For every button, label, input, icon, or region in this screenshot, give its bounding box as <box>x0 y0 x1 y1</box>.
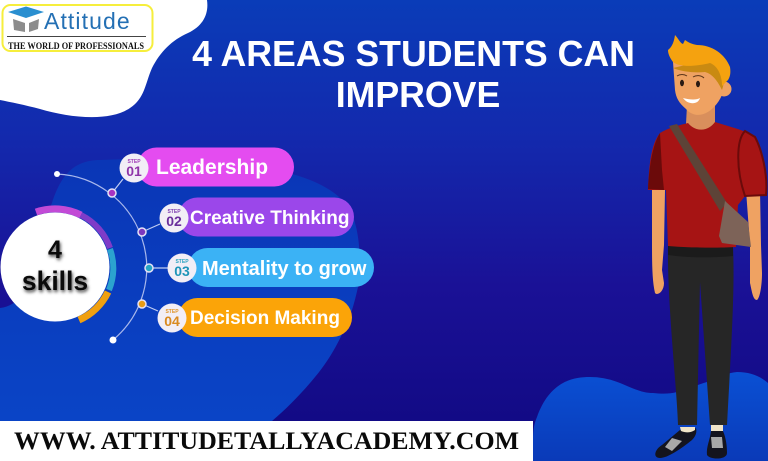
white top-left shape with logo <box>0 0 207 117</box>
label: skills <box>22 266 88 296</box>
end dots <box>54 171 60 177</box>
website bar: WWW. ATTITUDETALLYACADEMY.COM <box>14 428 519 455</box>
waistband <box>668 246 733 257</box>
label: 4 <box>48 236 62 264</box>
neck <box>686 105 715 132</box>
step badge 02 <box>160 204 188 232</box>
node 4 <box>138 300 146 308</box>
shirt <box>648 122 766 248</box>
logo icon: graduation cap <box>8 6 44 32</box>
title <box>192 34 635 115</box>
step badge 03: 03 <box>174 263 190 279</box>
step badge 03 <box>168 254 196 282</box>
progress ring <box>36 209 113 320</box>
step badge 03: STEP <box>175 259 189 265</box>
shirt left sleeve shade <box>648 133 664 190</box>
step badge 04: 04 <box>164 313 180 329</box>
title: IMPROVE <box>336 75 500 115</box>
messenger bag <box>719 201 751 247</box>
step badge 01 <box>120 154 148 182</box>
step badge 01: 01 <box>126 163 142 179</box>
label shadow <box>23 238 89 298</box>
connector arcs and nodes <box>54 171 169 344</box>
ear <box>716 82 732 96</box>
node 1 <box>108 189 116 197</box>
step badge 01: STEP <box>127 159 141 165</box>
step badge 04 <box>158 304 186 332</box>
step 4: Decision Making <box>158 298 352 337</box>
website bar <box>0 421 533 461</box>
shirt right sleeve <box>738 131 766 196</box>
step 2: Creative Thinking: Creative Thinking <box>190 208 349 229</box>
arms <box>652 190 665 294</box>
step 1: Leadership: Leadership <box>156 156 268 179</box>
bag strap <box>669 124 727 211</box>
step badge 04: STEP <box>165 309 179 315</box>
logo box <box>2 5 152 51</box>
face details <box>680 80 684 86</box>
label shadow: 4 <box>49 238 63 266</box>
node 3 <box>145 264 153 272</box>
step badge 02: 02 <box>166 213 182 229</box>
step 4: Decision Making: Decision Making <box>190 308 340 329</box>
node 2 <box>138 228 146 236</box>
step badge 02: STEP <box>167 209 181 215</box>
label shadow: skills <box>23 268 89 298</box>
step 1: Leadership <box>120 148 294 186</box>
step 3: Mentality to grow: Mentality to grow <box>202 258 367 280</box>
step 3: Mentality to grow <box>168 248 374 287</box>
trousers <box>668 247 734 425</box>
shoes <box>655 428 696 458</box>
character illustration <box>648 35 766 459</box>
center circle: 4 skills <box>0 209 113 322</box>
logo wordmark: Attitude <box>44 8 131 34</box>
background blob bottom right <box>533 372 768 461</box>
background blob left <box>0 159 360 421</box>
label <box>22 236 88 296</box>
hair <box>668 35 730 86</box>
title: 4 AREAS STUDENTS CAN <box>192 34 635 74</box>
step 2: Creative Thinking <box>160 198 354 236</box>
hair shade <box>673 62 724 90</box>
head <box>673 62 722 115</box>
logo tagline: THE WORLD OF PROFESSIONALS <box>8 41 144 51</box>
